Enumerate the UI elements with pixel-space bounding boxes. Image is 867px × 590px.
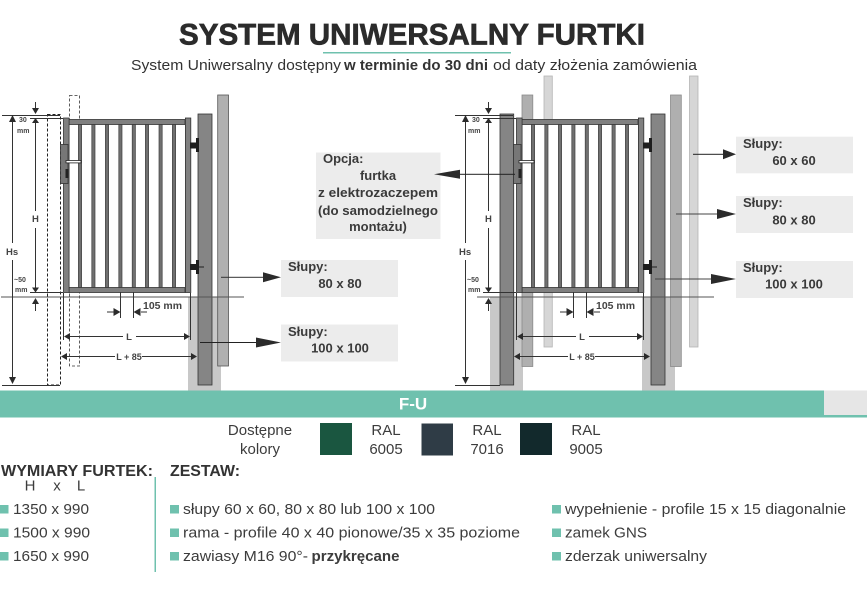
panel: kit contents: zamek GNS (565, 524, 647, 542)
swatch RAL 7016 (422, 424, 453, 456)
lock (60, 144, 81, 184)
arrow: option to lock (434, 170, 515, 179)
left gate diagram (1, 95, 244, 391)
callout: right post 80 x 80: Słupy: (743, 195, 783, 210)
dimension labels: Hs (459, 247, 471, 258)
panel: kit contents: zawiasy M16 90°- (183, 548, 308, 565)
panel: kit contents: rama - profile 40 x 40 pionowe/35 x 35 poziome (183, 524, 520, 542)
panel: kit contents: przykręcane (312, 548, 400, 565)
panel: kit contents: słupy 60 x 60, 80 x 80 lub 100 x 100 (183, 501, 435, 518)
panel: gate dimensions: 1350 x 990 (13, 501, 89, 518)
panel: gate dimensions (0, 463, 153, 565)
callout: right post 100 x 100: 100 x 100 (765, 276, 823, 292)
lock with electric strike (514, 144, 534, 184)
dimension labels: Hs (6, 247, 18, 258)
callout: right post 100 x 100 (736, 260, 853, 298)
dimension labels: 105 mm (596, 300, 635, 312)
swatch RAL 6005 (320, 423, 352, 455)
subtitle: w terminie do 30 dni (343, 57, 488, 74)
panel: gate dimensions: WYMIARY FURTEK: (1, 463, 153, 480)
dimension labels: 30 (472, 117, 480, 124)
available colours: kolory (240, 441, 281, 458)
gate (64, 118, 191, 292)
hinges (643, 138, 657, 274)
swatch RAL 9005 (520, 423, 552, 455)
post 80 x 80 (218, 95, 228, 366)
callout: left post 100 x 100 (281, 324, 398, 362)
callout: right post 60 x 60: Słupy: (743, 136, 783, 151)
callout: right post 60 x 60 (736, 136, 853, 173)
posts 60 x 60 (544, 76, 698, 347)
arrow: right post 60 (693, 149, 736, 159)
subtitle (131, 57, 698, 74)
dimension labels: L (126, 332, 132, 343)
available colours: 7016 (470, 441, 504, 458)
post 100 x 100 (198, 114, 212, 385)
ground line (477, 296, 714, 298)
concrete footings (490, 297, 675, 391)
callout: option electric strike: furtka (360, 168, 397, 183)
panel: kit contents: wypełnienie - profile 15 x 15 diagonalnie (564, 501, 846, 518)
available colours: RAL (571, 422, 601, 439)
available colours: RAL (472, 422, 502, 439)
dimension labels: ~50 (467, 277, 479, 284)
hinges (190, 138, 204, 274)
panel: gate dimensions: H (25, 478, 35, 494)
callout: option electric strike: Opcja: (323, 151, 363, 166)
divider (154, 477, 156, 572)
dimension labels (459, 117, 635, 362)
callout: option electric strike: z elektrozaczepem (318, 185, 438, 200)
dimension labels: ~50 (14, 277, 26, 284)
panel: gate dimensions: x (53, 478, 61, 494)
title: SYSTEM UNIWERSALNY FURTKI (179, 18, 645, 52)
callout: left post 80 x 80: Słupy: (288, 259, 328, 274)
arrow: right post 80 (676, 209, 736, 219)
dimension labels: L + 85 (116, 352, 142, 362)
dimension labels: mm (15, 287, 27, 294)
ground line (1, 296, 244, 298)
callout: right post 80 x 80 (736, 195, 853, 233)
dimension labels: H (32, 214, 39, 225)
dimension labels: H (485, 214, 492, 225)
panel: gate dimensions: L (77, 478, 85, 494)
band F-U (0, 390, 867, 418)
callout: left post 80 x 80 (281, 259, 398, 297)
callout: right post 60 x 60: 60 x 60 (772, 153, 816, 168)
dimension labels: mm (17, 128, 29, 135)
dashed optional post wide (48, 114, 60, 385)
available colours (228, 422, 603, 458)
arrow: left post 80 (221, 272, 281, 282)
panel: kit contents (170, 463, 846, 565)
callout: left post 100 x 100: Słupy: (288, 324, 328, 339)
callout: option electric strike: montażu) (349, 219, 407, 234)
title underline (323, 52, 511, 54)
dimension labels (6, 117, 182, 362)
posts 80 x 80 (522, 95, 681, 366)
panel: kit contents: ZESTAW: (170, 463, 240, 480)
panel: gate dimensions: 1500 x 990 (13, 524, 90, 542)
dimension lines (2, 102, 197, 386)
dashed optional post narrow (70, 96, 80, 366)
panel: kit contents: zderzak uniwersalny (565, 548, 708, 565)
callout: right post 80 x 80: 80 x 80 (772, 212, 816, 228)
callout: option electric strike (316, 151, 440, 239)
dimension labels: 105 mm (143, 300, 182, 312)
available colours: 9005 (569, 441, 603, 458)
dimension labels: mm (468, 287, 480, 294)
dimension labels: L (579, 332, 585, 343)
available colours: RAL (371, 422, 401, 439)
callout: right post 100 x 100: Słupy: (743, 260, 783, 275)
dimension labels: L + 85 (569, 352, 595, 362)
callout: left post 80 x 80: 80 x 80 (318, 276, 362, 291)
dimension lines (455, 102, 650, 386)
dimension labels: mm (468, 128, 480, 135)
arrow: right post 100 (655, 274, 736, 284)
gate (516, 118, 644, 292)
posts 100 x 100 (500, 114, 665, 385)
band F-U: F-U (399, 394, 427, 414)
dimension labels: 30 (19, 117, 27, 124)
subtitle: od daty złożenia zamówienia (493, 57, 698, 74)
arrow: left post 100 (200, 338, 281, 348)
right gate diagram (455, 76, 714, 391)
subtitle: System Uniwersalny dostępny (131, 57, 342, 74)
callout: option electric strike: (do samodzielnego (318, 203, 438, 218)
panel: gate dimensions: 1650 x 990 (13, 548, 89, 565)
callout: left post 100 x 100: 100 x 100 (311, 340, 369, 356)
available colours: 6005 (369, 441, 403, 458)
concrete footing (188, 297, 221, 391)
available colours: Dostępne (228, 422, 292, 439)
